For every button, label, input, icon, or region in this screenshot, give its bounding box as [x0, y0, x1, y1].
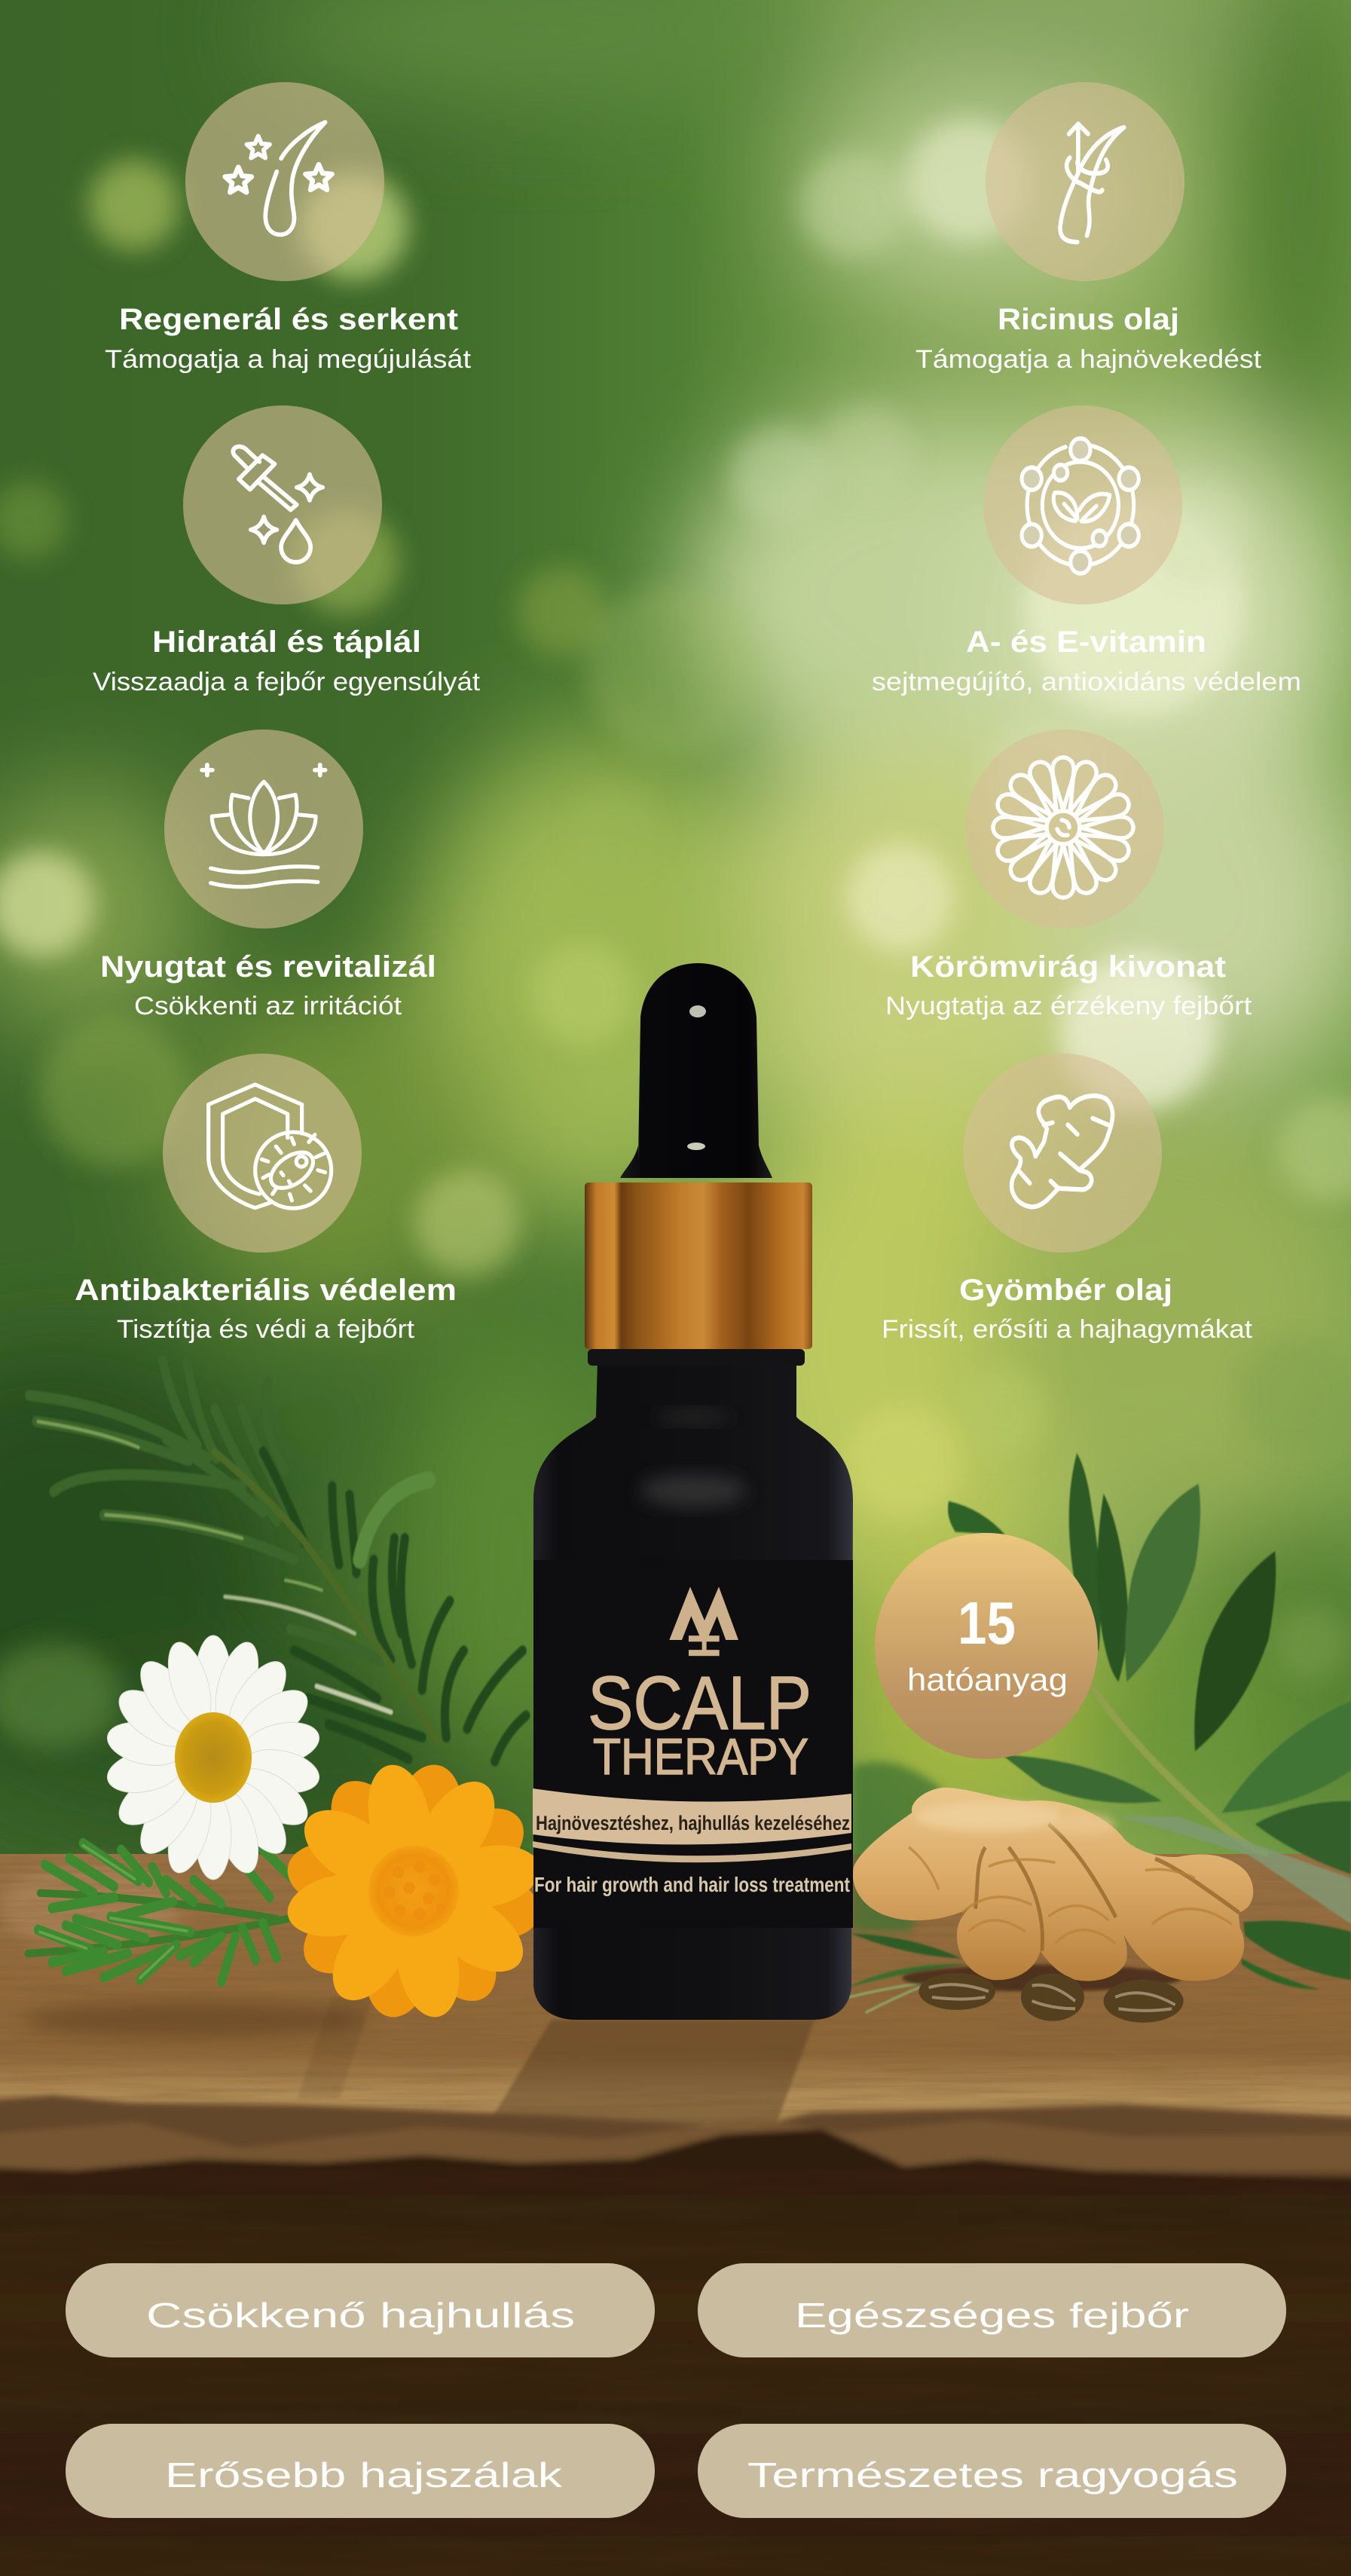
badge: 15 active ingredients: [875, 1533, 1098, 1759]
feature: hidratál: [93, 405, 481, 696]
plant: rosemary sprig, left: [29, 1361, 526, 1761]
label: [533, 1560, 853, 1928]
neck ring: [588, 1349, 805, 1366]
title: Nyugtat és revitalizál: [100, 950, 436, 984]
subtitle: sejtmegújító, antioxidáns védelem: [872, 668, 1301, 696]
bottle body: [533, 1360, 853, 2020]
brand name: SCALP: [588, 1661, 812, 1745]
brand name: [588, 1661, 812, 1785]
plant: fern on the table: [28, 1843, 294, 1981]
flower: calendula: [282, 1759, 546, 2023]
subtitle: Frissít, erősíti a hajhagymákat: [882, 1315, 1253, 1344]
subtitle: Támogatja a hajnövekedést: [915, 345, 1262, 374]
dropper bulb: [620, 963, 772, 1178]
benefit pill: stronger strands: [66, 2424, 655, 2518]
icon: dropper: [233, 447, 322, 562]
plant: olive leaves, right: [847, 1453, 1351, 2012]
english text: For hair growth and hair loss treatment: [534, 1873, 850, 1896]
title: Gyömbér olaj: [959, 1274, 1172, 1307]
badge: 15 active ingredients: hatóanyag: [907, 1662, 1068, 1697]
title: A- és E-vitamin: [966, 626, 1206, 659]
title: Antibakteriális védelem: [75, 1274, 457, 1307]
benefit pill: natural shine: [698, 2424, 1286, 2518]
icon: ginger: [1012, 1096, 1113, 1207]
badge: 15 active ingredients: 15: [958, 1589, 1016, 1657]
subtitle: Csökkenti az irritációt: [134, 992, 402, 1020]
benefit pill: healthy scalp: Egészséges fejbőr: [795, 2296, 1189, 2335]
brand name: THERAPY: [593, 1728, 808, 1785]
gold collar: [585, 1182, 812, 1349]
benefit pill: healthy scalp: [698, 2263, 1286, 2357]
subtitle: Visszaadja a fejbőr egyensúlyát: [93, 668, 481, 696]
subtitle: Nyugtatja az érzékeny fejbőrt: [885, 992, 1252, 1020]
benefit pill: natural shine: Természetes ragyogás: [747, 2455, 1238, 2495]
feature: antibakteriális: [75, 1054, 457, 1344]
background: green bokeh: [0, 0, 1351, 1899]
feature: nyugtat: [100, 730, 436, 1020]
label band: [533, 1788, 851, 1845]
icon: hair with stars: [225, 122, 332, 234]
title: Ricinus olaj: [998, 303, 1179, 336]
band text: Hajnövesztéshez, hajhullás kezeléséhez: [536, 1812, 850, 1834]
icon: castor leaf and arrow: [1060, 124, 1124, 242]
icon: molecule with leaves: [1022, 439, 1139, 574]
feature: regenerál: [105, 82, 472, 374]
brand logo: [669, 1586, 738, 1656]
icon: calendula flower: [993, 757, 1133, 898]
feature: körömvirág: [885, 730, 1252, 1020]
ginger root: [853, 1788, 1253, 1991]
subtitle: Támogatja a haj megújulását: [105, 345, 472, 374]
flower: daisy: [104, 1635, 322, 1880]
benefit pill: reduced hair loss: [66, 2263, 655, 2357]
feature: ricinus olaj: [915, 82, 1262, 374]
title: Körömvirág kivonat: [910, 950, 1226, 984]
subtitle: Tisztítja és védi a fejbőrt: [117, 1315, 415, 1344]
title: Hidratál és táplál: [152, 626, 421, 659]
icon: lotus on water: [202, 765, 326, 887]
product: dropper bottle: [533, 963, 853, 2020]
benefit pill: reduced hair loss: Csökkenő hajhullás: [146, 2296, 575, 2335]
feature: gyömbér olaj: [882, 1054, 1253, 1344]
castor seeds: [918, 1973, 1184, 2023]
benefit pill: stronger strands: Erősebb hajszálak: [165, 2455, 563, 2495]
icon: shield and bacterium: [209, 1085, 332, 1208]
feature: vitamins: [872, 405, 1301, 696]
wooden table: [0, 1854, 1351, 2576]
title: Regenerál és serkent: [119, 303, 458, 336]
